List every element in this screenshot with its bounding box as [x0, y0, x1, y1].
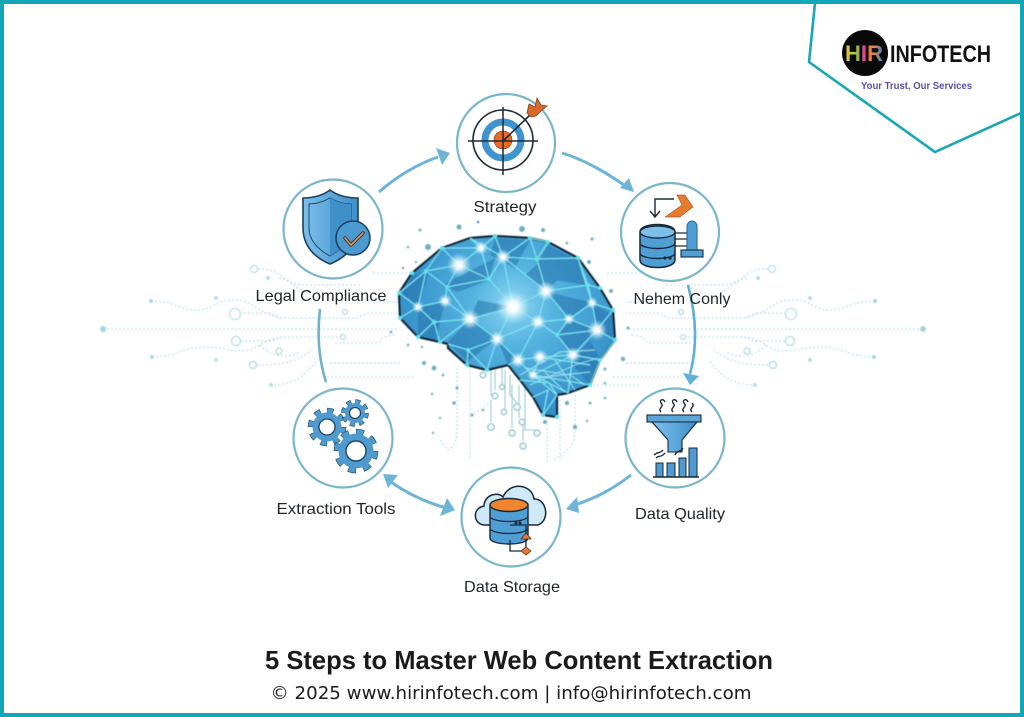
icon: shield with check [303, 190, 370, 264]
logo letters HIR: HIR [845, 41, 883, 66]
legal compliance label: Legal Compliance [256, 288, 387, 305]
legal compliance circle [284, 180, 382, 278]
icon: funnel with bars [647, 400, 701, 477]
icon: cloud database [475, 486, 546, 555]
logo wordmark: INFOTECH [890, 41, 991, 68]
strategy circle [457, 94, 555, 192]
logo tagline: Your Trust, Our Services [861, 80, 972, 92]
arrow: legal compliance to strategy [379, 148, 450, 192]
database workflow label: Nehem Conly [634, 291, 730, 308]
brain silhouette [399, 236, 615, 417]
logo badge [842, 30, 888, 76]
data quality circle [626, 388, 724, 488]
step: extraction tools [276, 388, 396, 518]
brain dark facets [402, 238, 613, 382]
step: data quality [626, 388, 725, 523]
step: legal compliance [256, 180, 387, 305]
icon: target with arrow [468, 98, 547, 175]
extraction tools label: Extraction Tools [276, 501, 396, 518]
arrow: strategy to next step [562, 153, 634, 192]
brain dense fold lines [520, 350, 598, 392]
scattered dots around brain [390, 220, 630, 434]
strategy label: Strategy [474, 199, 536, 216]
extraction tools circle [294, 388, 392, 488]
database workflow circle [621, 183, 719, 281]
arrow: extraction tools to legal compliance [319, 309, 326, 382]
step: strategy [457, 94, 555, 216]
data storage circle [462, 468, 560, 566]
brain illustration [397, 234, 617, 419]
logo corner panel [809, 3, 1021, 152]
icon: gears [310, 402, 376, 470]
arrow: data storage and extraction tools [383, 474, 455, 516]
arrow: data quality to data storage [566, 475, 631, 513]
brain mesh lines [399, 236, 615, 415]
brain outline nodes [397, 234, 617, 419]
circuit traces: left [100, 266, 420, 387]
data quality label: Data Quality [635, 506, 725, 523]
arrow: next step to data quality [683, 285, 699, 385]
data storage label: Data Storage [464, 579, 560, 596]
footer contact line: © 2025 www.hirinfotech.com | info@hirinfotech.com [270, 683, 752, 704]
title: 5 Steps to Master Web Content Extraction [265, 645, 773, 675]
circuit traces: below brain [440, 368, 640, 462]
logo [842, 30, 991, 92]
icon: database with arrows [640, 195, 703, 268]
step: data storage [462, 468, 560, 596]
step: database workflow [621, 183, 730, 308]
brain glowing nodes [412, 241, 607, 381]
circuit traces: right [606, 266, 926, 387]
